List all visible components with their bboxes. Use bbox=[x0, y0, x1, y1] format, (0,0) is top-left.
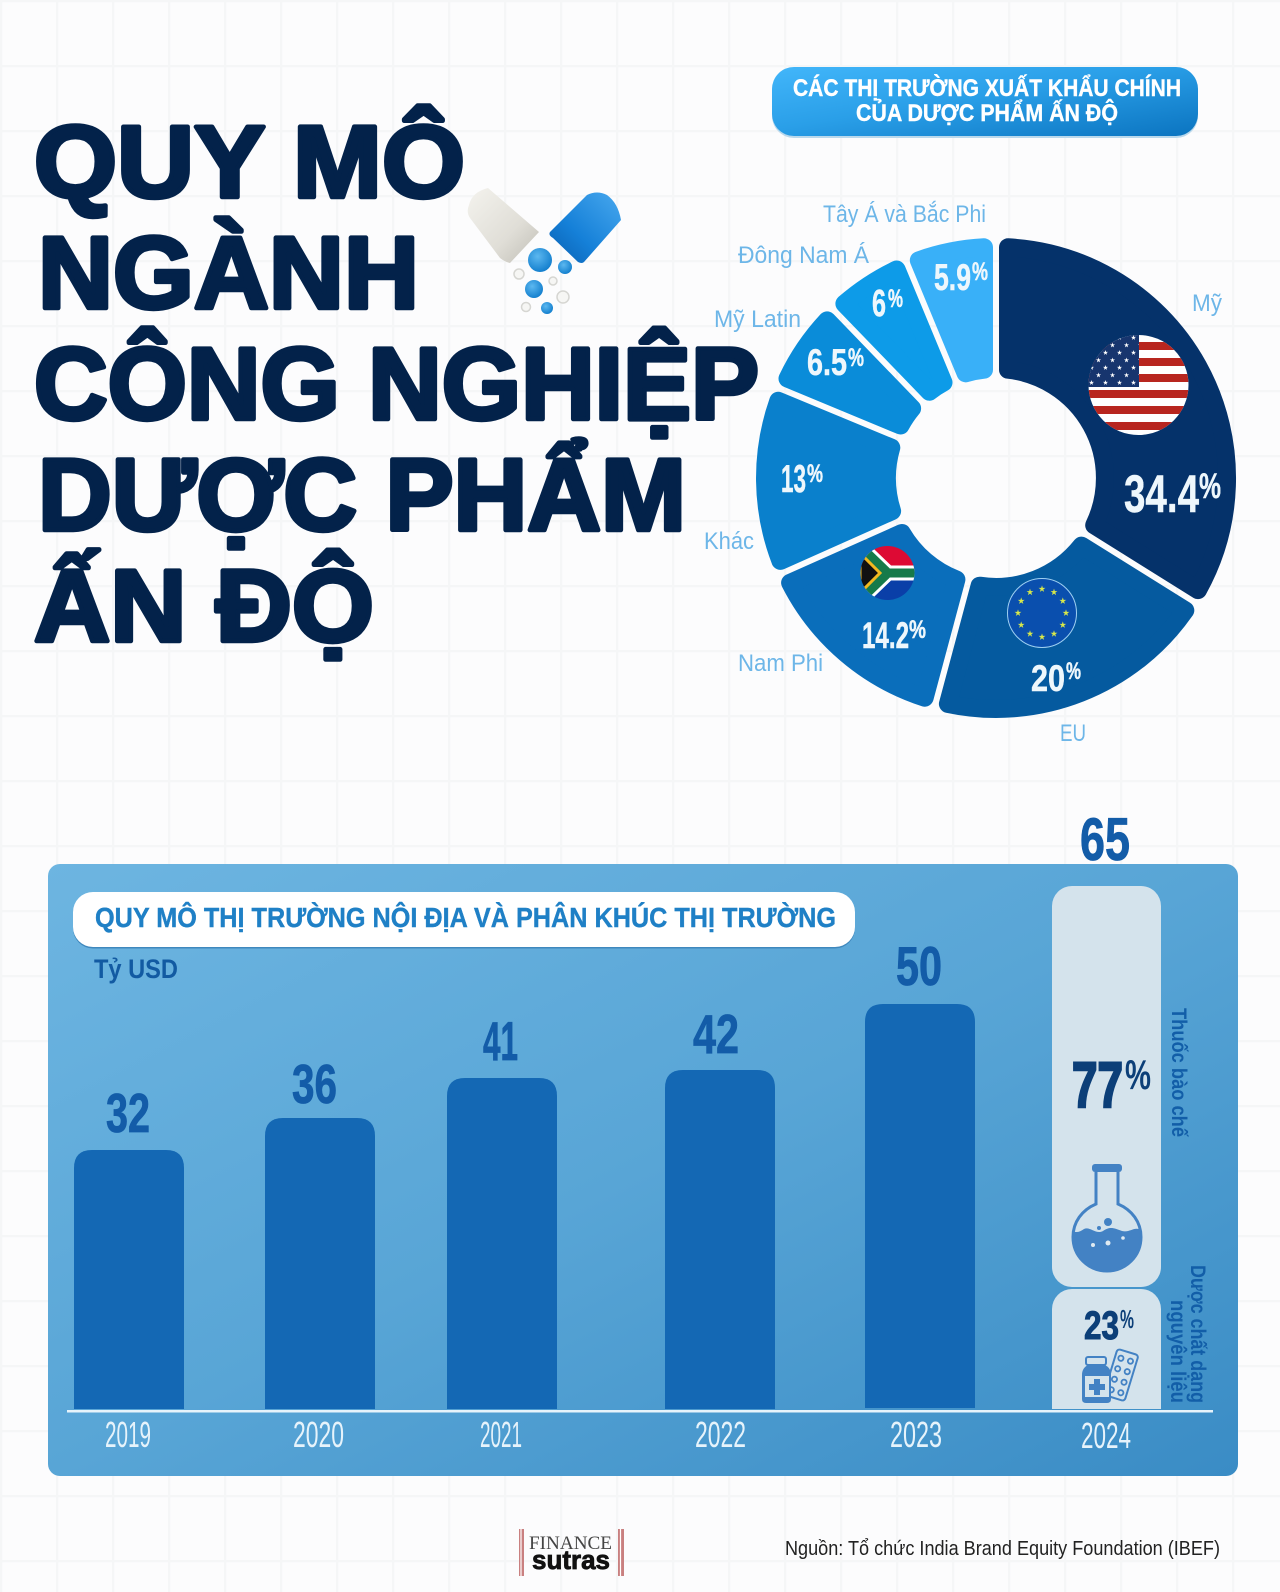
icon: flask bbox=[1072, 1164, 1142, 1272]
donut value labels: 34.4 bbox=[1124, 465, 1199, 524]
segment: EU bbox=[948, 546, 1185, 709]
bar: 2023 bbox=[865, 935, 975, 1455]
value label: 2024 total: 65 bbox=[1080, 806, 1130, 873]
bar: 2021: 41 bbox=[483, 1010, 518, 1072]
title: QUY MÔ bbox=[34, 105, 465, 219]
donut value labels: % bbox=[1199, 467, 1221, 506]
title bbox=[34, 105, 759, 663]
donut category labels: Khác bbox=[704, 528, 754, 555]
logo: Finance Sutras: sutras bbox=[532, 1545, 610, 1575]
bar: 2020 bbox=[265, 1053, 375, 1455]
heading: domestic market and segments: QUY MÔ THỊ TRƯỜNG NỘI ĐỊA VÀ PHÂN KHÚC THỊ TRƯỜNG bbox=[95, 901, 836, 933]
segment: formulations 77% bbox=[1052, 886, 1161, 1287]
donut value labels: % bbox=[909, 616, 926, 644]
donut value labels: % bbox=[848, 344, 864, 372]
segment: South Africa bbox=[790, 533, 956, 698]
bar: 2022: 2022 bbox=[695, 1414, 746, 1455]
donut category labels: Mỹ bbox=[1192, 290, 1222, 317]
heading: export markets bbox=[772, 67, 1198, 138]
panel: domestic market size bbox=[48, 806, 1238, 1476]
segment: formulations 77%: 77 bbox=[1072, 1049, 1123, 1121]
icon: EU flag bbox=[1008, 578, 1076, 648]
segment: Southeast Asia bbox=[844, 270, 944, 392]
donut category labels bbox=[704, 201, 1222, 747]
bar: 2020: 36 bbox=[292, 1053, 337, 1115]
donut category labels: Nam Phi bbox=[738, 650, 823, 677]
bar: 2021: 2021 bbox=[480, 1414, 522, 1455]
icon: medicine bottle and blister bbox=[1082, 1349, 1139, 1403]
vertical label: active ingredients: nguyên liệu bbox=[1166, 1300, 1189, 1403]
vertical label: formulations: Thuốc bào chế bbox=[1167, 1008, 1190, 1137]
bar: 2023: 50 bbox=[896, 935, 942, 997]
segment: Other bbox=[765, 401, 892, 561]
segment: active ingredients 23%: 23 bbox=[1084, 1304, 1119, 1348]
axis baseline bbox=[67, 1410, 1213, 1412]
segment: West Asia and North Africa bbox=[919, 247, 984, 373]
source note: Nguồn: Tổ chức India Brand Equity Foundation (IBEF) bbox=[785, 1538, 1220, 1560]
title: ẤN ĐỘ bbox=[34, 549, 374, 663]
vertical label: active ingredients: Dược chất dạng bbox=[1186, 1265, 1209, 1403]
bar: 2019 bbox=[74, 1082, 184, 1455]
bar: 2019: 2019 bbox=[105, 1414, 151, 1455]
segment: active ingredients 23% bbox=[1052, 1289, 1161, 1409]
donut value labels: 13 bbox=[781, 458, 806, 501]
bar: 2022 bbox=[665, 1003, 775, 1455]
donut value labels: 6 bbox=[872, 283, 886, 325]
donut value labels: 6.5 bbox=[807, 342, 847, 383]
segment: United States bbox=[1008, 247, 1227, 590]
donut category labels: EU bbox=[1060, 720, 1086, 747]
logo: Finance Sutras bbox=[519, 1529, 624, 1576]
donut value labels: % bbox=[972, 258, 988, 286]
donut value labels: % bbox=[1066, 658, 1081, 685]
title: CÔNG NGHIỆP bbox=[34, 327, 759, 441]
bar: 2023: 2023 bbox=[890, 1414, 942, 1455]
heading: export markets: CỦA DƯỢC PHẨM ẤN ĐỘ bbox=[856, 98, 1118, 127]
icon: capsule with granules bbox=[468, 188, 621, 314]
heading: export markets: CÁC THỊ TRƯỜNG XUẤT KHẨU CHÍNH bbox=[793, 74, 1181, 102]
bar: 2024 segmented bbox=[1052, 806, 1161, 1456]
bar: 2020: 2020 bbox=[293, 1414, 344, 1455]
title: DƯỢC PHẨM bbox=[38, 438, 686, 552]
logo: Finance Sutras: FINANCE bbox=[529, 1533, 612, 1554]
bar: 2022: 42 bbox=[693, 1003, 739, 1065]
segment: active ingredients 23%: % bbox=[1120, 1304, 1134, 1334]
segment: formulations 77%: % bbox=[1125, 1051, 1151, 1098]
title: NGÀNH bbox=[38, 216, 419, 330]
icon: South Africa flag bbox=[860, 546, 916, 601]
bar: 2019: 32 bbox=[106, 1082, 150, 1144]
donut value labels bbox=[781, 257, 1221, 699]
donut value labels: % bbox=[807, 460, 823, 488]
heading: domestic market and segments bbox=[73, 892, 855, 948]
vertical label: active ingredients bbox=[1166, 1265, 1209, 1403]
segment: Latin America bbox=[788, 320, 912, 426]
donut category labels: Mỹ Latin bbox=[714, 306, 801, 333]
icon: US flag bbox=[1088, 334, 1190, 436]
unit label: Tỷ USD bbox=[94, 954, 178, 984]
donut value labels: 14.2 bbox=[862, 615, 909, 656]
donut category labels: Tây Á và Bắc Phi bbox=[823, 201, 986, 228]
donut chart: export markets bbox=[765, 247, 1227, 709]
year label: 2024: 2024 bbox=[1081, 1415, 1131, 1456]
donut value labels: 5.9 bbox=[934, 257, 971, 298]
donut value labels: 20 bbox=[1031, 658, 1065, 699]
donut category labels: Đông Nam Á bbox=[738, 242, 869, 269]
bar: 2021 bbox=[447, 1010, 557, 1455]
donut value labels: % bbox=[888, 285, 903, 313]
